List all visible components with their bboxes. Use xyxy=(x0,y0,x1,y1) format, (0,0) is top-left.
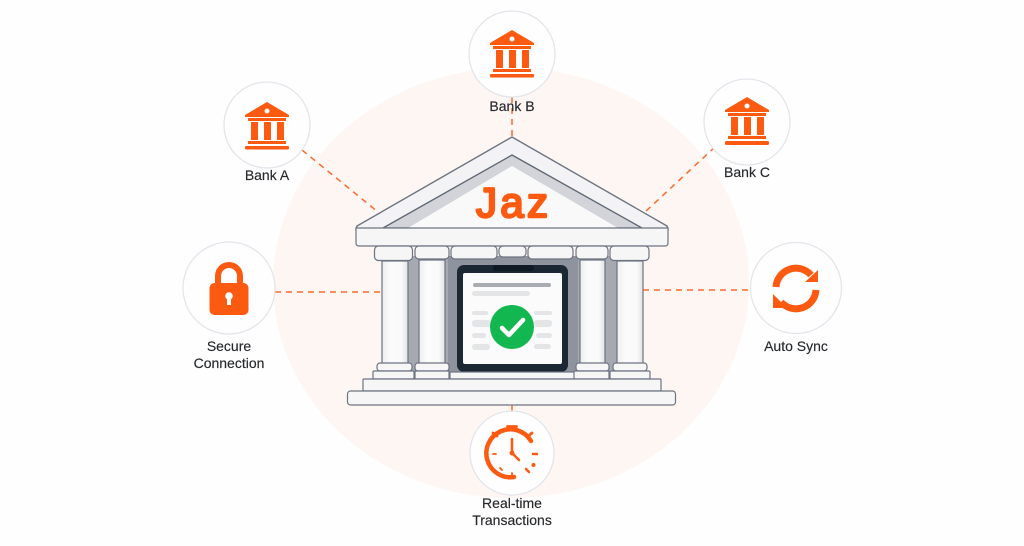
icon: bank xyxy=(490,30,534,78)
node: Bank A xyxy=(224,82,310,183)
label: Auto Sync xyxy=(764,338,828,354)
central bank building xyxy=(348,137,676,405)
icon: padlock xyxy=(210,265,248,315)
label: Bank C xyxy=(724,164,770,180)
icon: bank xyxy=(245,102,289,150)
capitals xyxy=(374,246,649,260)
node: Real-time Transactions: Transactions xyxy=(472,512,552,528)
label: Real-time xyxy=(482,495,542,511)
column bases and steps xyxy=(348,363,676,405)
label: Bank A xyxy=(245,167,290,183)
dashed connector: Auto Sync xyxy=(643,289,750,291)
icon: sync arrows xyxy=(773,268,818,309)
node: Bank B xyxy=(469,11,555,114)
icon: bank xyxy=(725,97,769,145)
node: Bank C xyxy=(704,79,790,180)
columns xyxy=(382,260,643,364)
logo: Jaz: Jaz xyxy=(476,179,548,226)
pediment xyxy=(356,137,668,246)
dashed connector: Secure Connection xyxy=(275,291,381,293)
node: Secure Connection xyxy=(183,242,275,371)
background circle xyxy=(273,68,749,498)
back wall xyxy=(405,256,619,374)
label: Secure xyxy=(207,338,251,354)
node: Secure Connection: Connection xyxy=(194,355,264,371)
icon: green check xyxy=(490,305,534,349)
dashed connector: Bank A xyxy=(302,150,378,212)
icon: stopwatch xyxy=(486,426,537,477)
tablet xyxy=(457,265,568,372)
node: Real-time Transactions xyxy=(470,411,554,528)
dashed connector: Bank C xyxy=(645,147,715,212)
label: Bank B xyxy=(489,98,535,114)
dashed connector: Bank B xyxy=(511,97,513,137)
node: Auto Sync xyxy=(750,242,842,354)
dashed connector: Real-time Transactions xyxy=(511,405,513,412)
